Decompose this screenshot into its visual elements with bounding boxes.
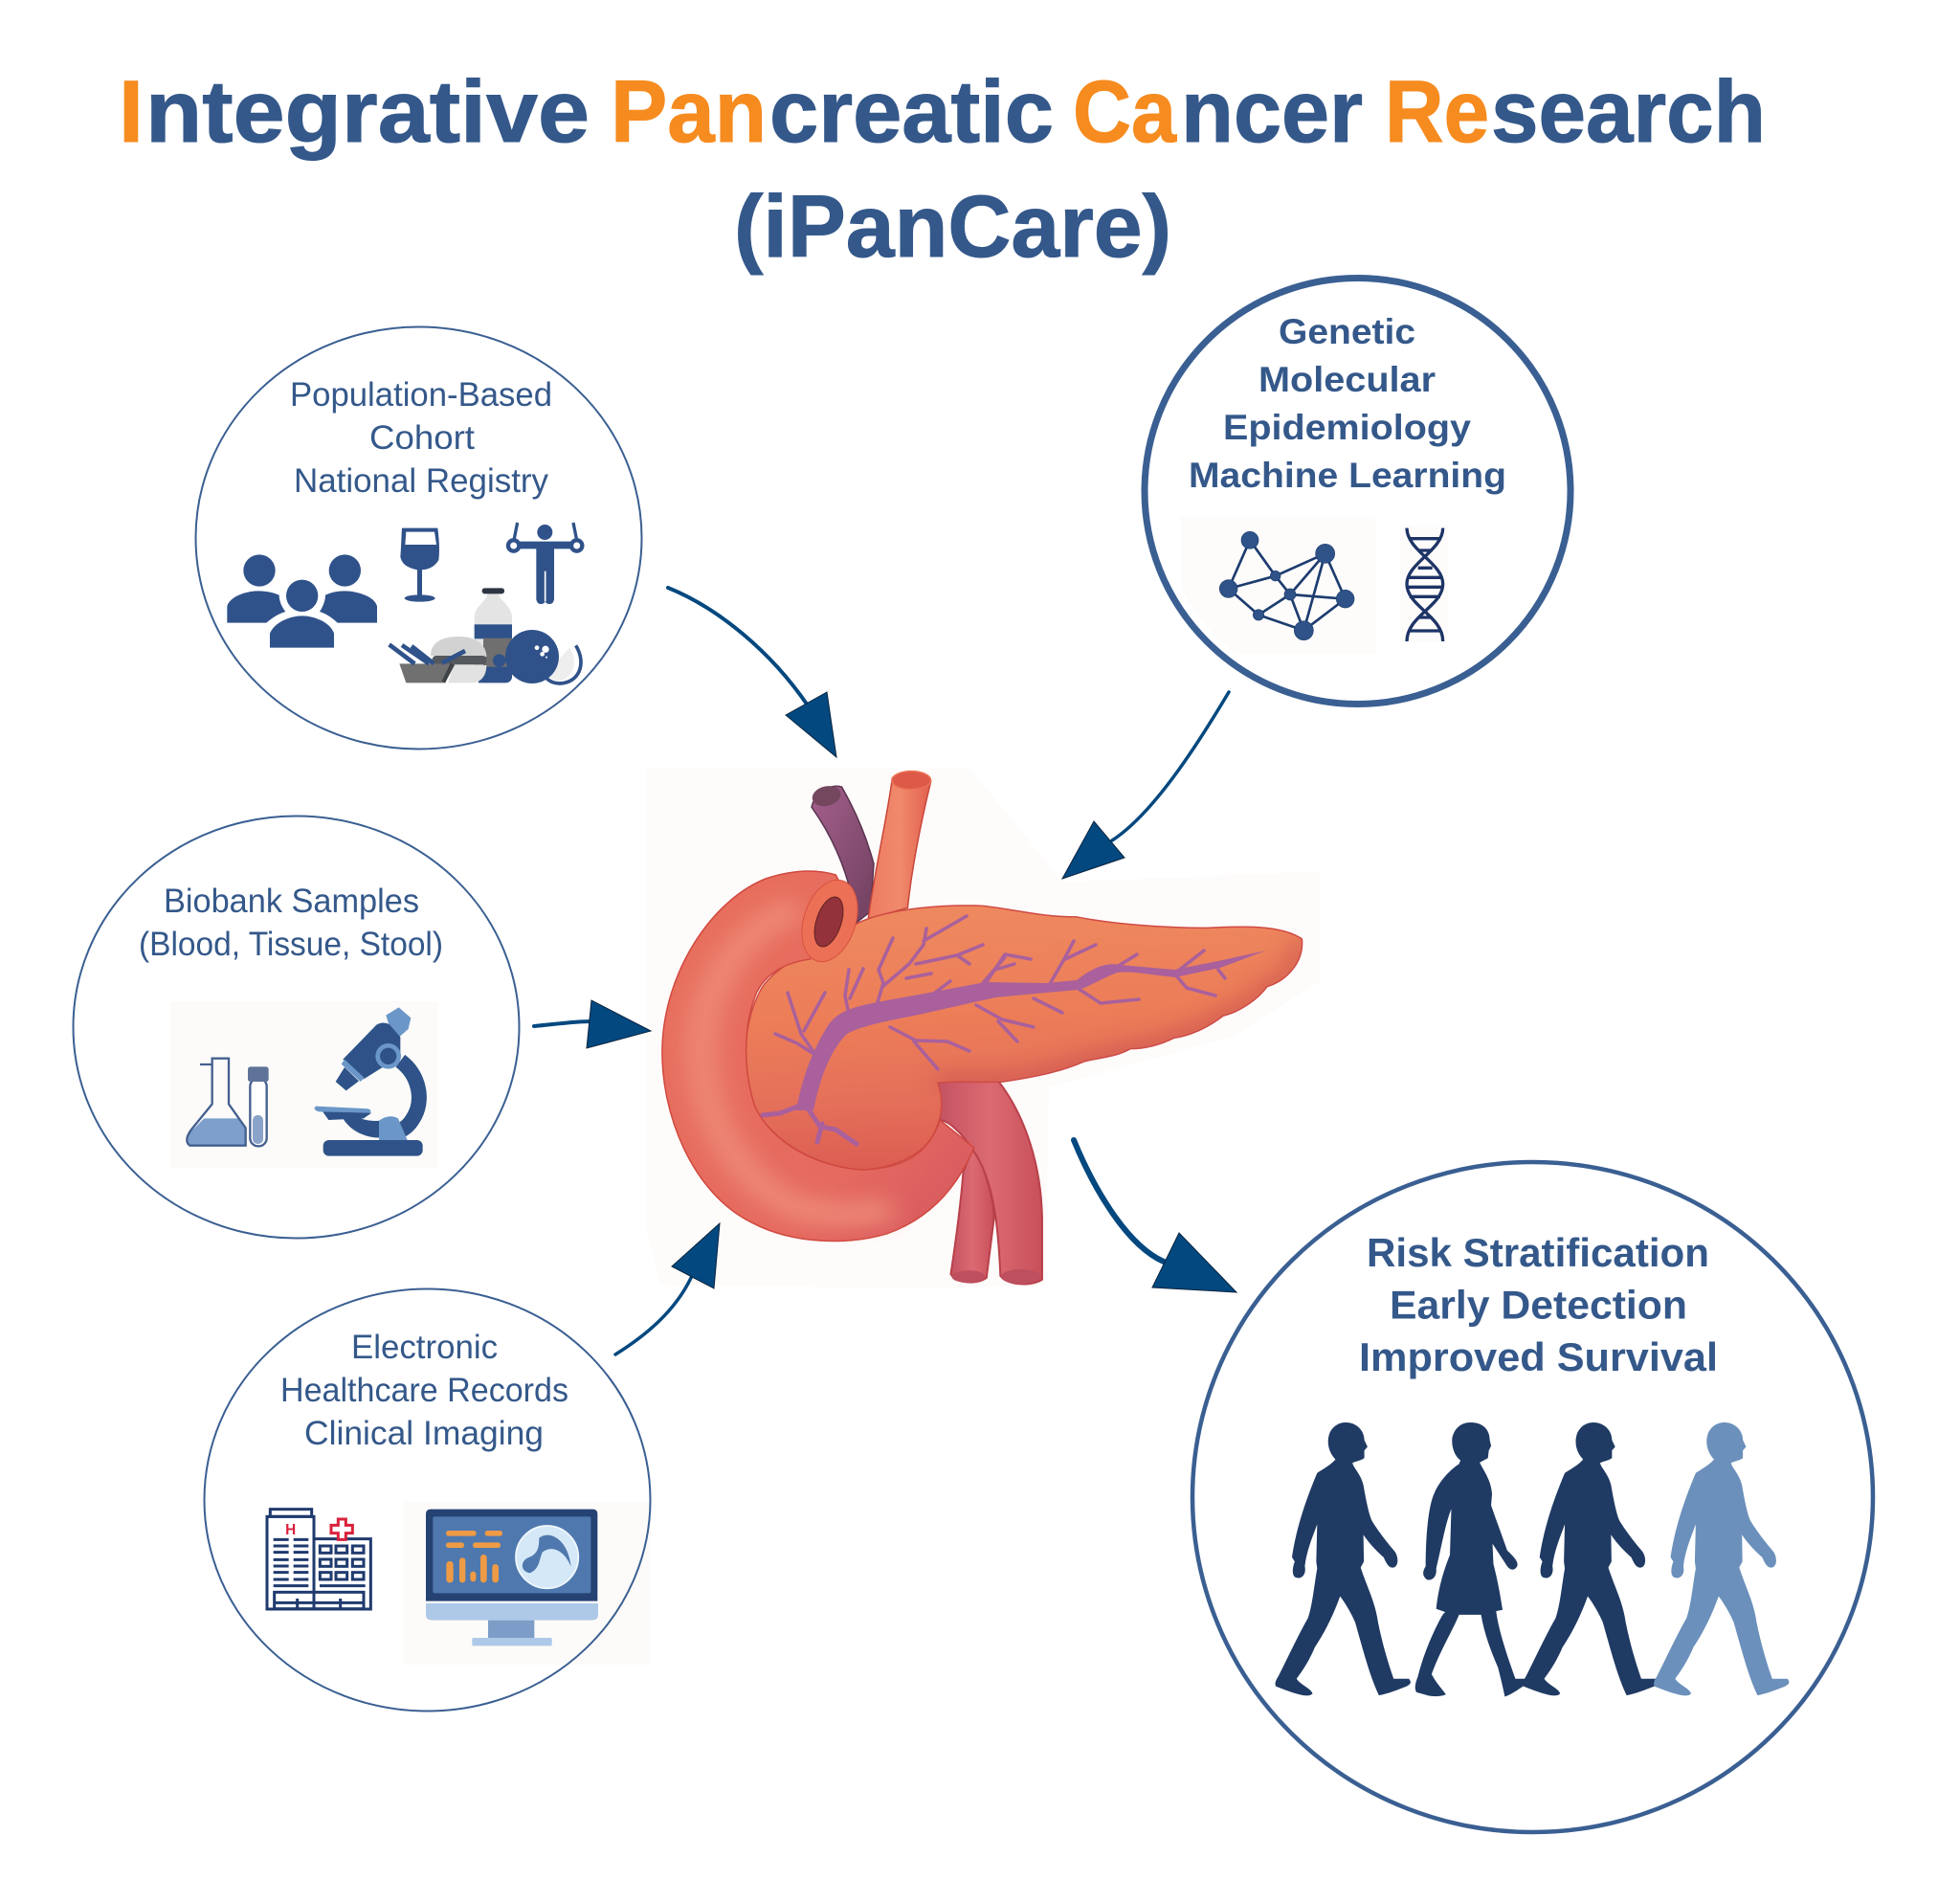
icon: flask and test tube [170,1001,438,1169]
vessel: vein [808,782,874,923]
icon: hospital [267,1510,370,1609]
text: healthcare labels: Clinical Imaging [304,1415,544,1452]
icon: DNA helix [1400,525,1448,641]
panel: risk stratification outcomes [1192,1162,1873,1832]
illustration: pancreas and duodenum [646,769,1321,1288]
title: Re [1385,63,1489,161]
text: healthcare labels [280,1329,568,1452]
text: outcome labels: Improved Survival [1359,1334,1718,1379]
icon: gymnast on rings [508,523,582,604]
text: healthcare labels: Healthcare Records [280,1372,568,1409]
text: healthcare labels: Electronic [351,1329,498,1366]
text: biobank labels [139,883,443,963]
panel: population-based cohort [195,327,641,749]
vessel: artery [868,772,931,919]
arrow: cohort to pancreas [668,588,836,757]
icon: hospital: H [285,1522,296,1538]
organ: duodenum opening [792,873,867,969]
text: genetic labels: Epidemiology [1223,408,1471,447]
text: genetic labels [1189,312,1506,495]
title: creatic [769,63,1054,161]
icon: food and drink [390,588,581,683]
panel: electronic healthcare records [205,1288,651,1712]
ducts: pancreatic veins [763,916,1266,1144]
title: (iPanCare) [734,178,1171,276]
icon: wine glass [400,528,439,602]
title: Pan [611,63,767,161]
title [119,63,1766,276]
title: search [1491,63,1766,161]
text: cohort labels: Cohort [369,419,475,457]
text: outcome labels: Risk Stratification [1367,1230,1709,1275]
arrow: genetic to pancreas [1062,692,1229,879]
panel: biobank samples [73,816,519,1239]
lower vessels [938,1081,1042,1284]
text: biobank labels: Biobank Samples [164,883,419,920]
icon: network graph [1181,516,1376,654]
text: cohort labels: National Registry [294,462,548,500]
icon: walking people [1275,1422,1789,1697]
text: outcome labels [1359,1230,1718,1379]
title: Ca [1073,63,1177,161]
title: ntegrative [145,63,590,161]
organ: duodenum [662,871,974,1241]
arrow: records to pancreas [615,1223,720,1354]
arrow: pancreas to outcomes [1074,1140,1236,1292]
arrow: biobank to pancreas [534,1000,651,1048]
text: genetic labels: Machine Learning [1189,456,1506,495]
title: ncer [1181,63,1363,161]
text: cohort labels: Population-Based [290,376,552,414]
panel: genetic molecular epidemiology [1145,278,1570,705]
organ: pancreas body [746,906,1303,1170]
title: I [119,63,144,161]
text: biobank labels: (Blood, Tissue, Stool) [139,926,443,963]
icon: microscope [315,1007,423,1156]
text: genetic labels: Genetic [1279,312,1415,351]
text: genetic labels: Molecular [1258,360,1436,399]
text: cohort labels [290,376,552,500]
text: outcome labels: Early Detection [1390,1283,1687,1327]
icon: imaging monitor [404,1502,651,1665]
icon: people group [227,554,377,648]
